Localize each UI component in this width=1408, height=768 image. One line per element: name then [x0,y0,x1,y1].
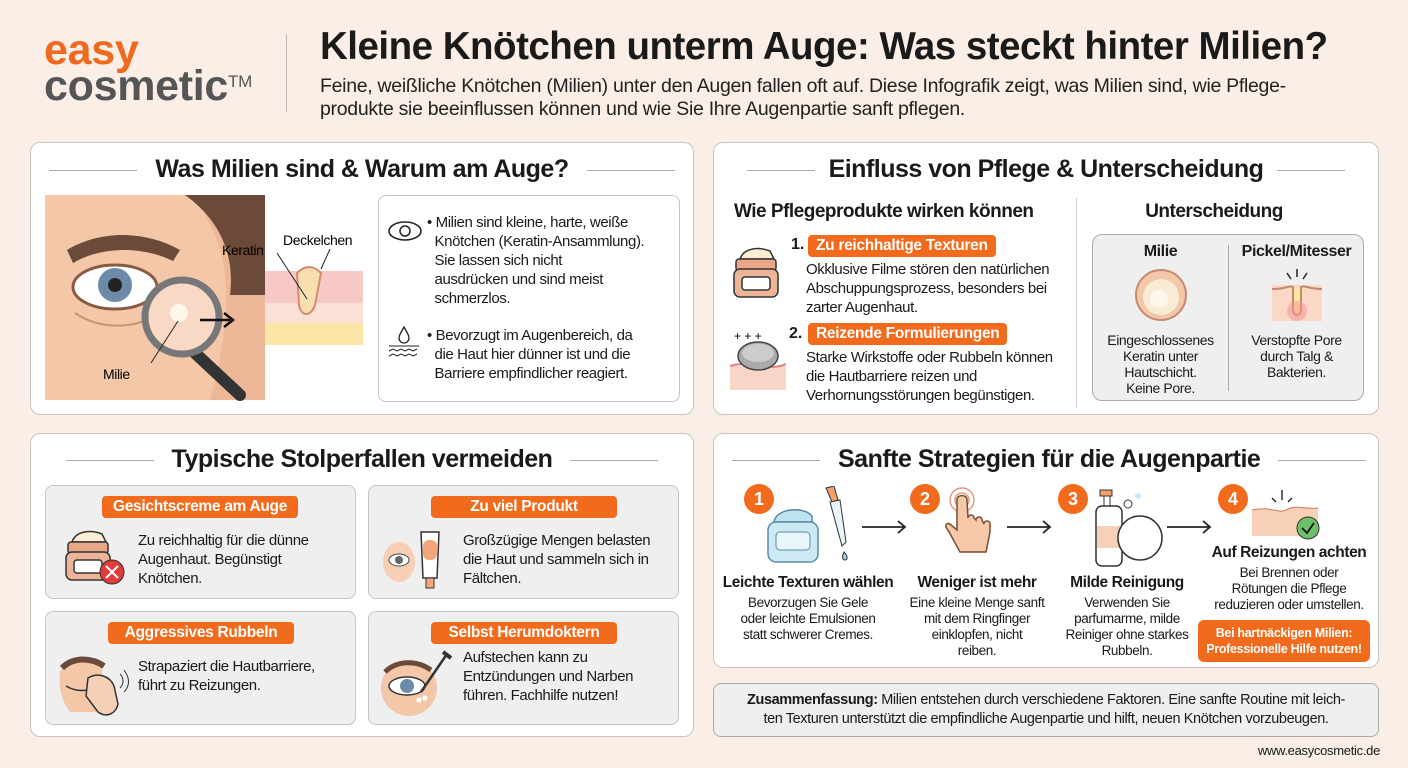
card 4: führen. Fachhilfe nutzen! [463,687,618,704]
step 3: Reiniger ohne starkes [1066,627,1188,642]
subtitle [320,75,1286,120]
heading: Was Milien sind & Warum am Auge? [155,155,569,183]
step 3: Rubbeln. [1102,643,1152,658]
step 2: mit dem Ringfinger [924,611,1030,626]
subtitle: Feine, weißliche Knötchen (Milien) unter den Augen fallen oft auf. Diese Infografik zeigt, was Milien sind, wie Pflege- [320,75,1286,97]
icon: scrub brush: + + + [734,329,762,343]
step 4: Bei Brennen oder [1240,565,1338,580]
summary: Zusammenfassung: Milien entstehen durch verschiedene Faktoren. Eine sanfte Routine mit leich- [747,692,1345,708]
step 1: 1 [754,489,764,509]
card 2 [368,485,679,599]
arrow [1007,520,1052,534]
column: Milie: Eingeschlossenes [1107,332,1214,348]
panel: Was Milien sind [30,142,694,415]
step 4: Auf Reizungen achten [1212,544,1366,561]
card 4: Aufstechen kann zu [463,649,588,666]
panel: Einfluss von Pflege: Reizende Formulierungen [816,325,999,342]
card 3: Aggressives Rubbeln [125,624,277,641]
bullet 2: Barriere empfindlicher reagiert. [435,365,628,382]
panel: Sanfte Strategien [713,433,1379,668]
panel: Einfluss von Pflege: die Hautbarriere reizen und [806,368,977,385]
summary: ten Texturen unterstützt die empfindliche Augenpartie und hilft, neuen Knötchen vorzubeugen. [763,711,1329,727]
icon: scrub brush [730,329,786,390]
column: Milie: Hautschicht. [1124,364,1197,380]
bullet 2: • Bevorzugt im Augenbereich, da [427,327,632,344]
column: Pickel: durch Talg & [1260,348,1333,364]
heading: Sanfte Strategien für die Augenpartie [838,445,1260,473]
arrow [862,520,906,534]
callout: Professionelle Hilfe nutzen! [1206,642,1362,656]
illustration: face, magnifier & skin section: Keratin [222,242,264,258]
bullet 1: Knötchen (Keratin-Ansammlung). [435,233,644,250]
step 1: statt schwerer Cremes. [743,627,873,642]
panel: Einfluss von Pflege [713,142,1379,415]
step 4 [1198,484,1370,662]
panel: Einfluss von Pflege: Starke Wirkstoffe oder Rubbeln können [806,349,1053,366]
step 2 [910,484,1045,658]
card 4 [368,611,679,725]
bullet 1: • Milien sind kleine, harte, weiße [427,214,628,231]
step 1: oder leichte Emulsionen [741,611,875,626]
card 2: Großzügige Mengen belasten [463,532,650,549]
card 1: Gesichtscreme am Auge [113,498,287,515]
bullet 1: ausdrücken und sind meist [435,271,603,288]
card 2: Zu viel Produkt [470,498,578,515]
summary [713,683,1379,737]
card 1 [45,485,356,599]
card 1: Knötchen. [138,570,202,587]
step 3: 3 [1068,489,1078,509]
panel: Einfluss von Pflege: Zu reichhaltige Texturen [816,237,988,254]
item 2: 2. [789,325,802,342]
logo: easy [44,26,138,74]
bullet 2 [427,327,633,382]
panel: Einfluss von Pflege: zarter Augenhaut. [806,299,918,316]
text box [378,195,680,402]
step 3: parfumarme, milde [1074,611,1180,626]
card 3: Strapaziert die Hautbarriere, [138,658,315,675]
step 3: Milde Reinigung [1070,574,1184,591]
panel: Einfluss von Pflege: Verhornungsstörungen begünstigen. [806,387,1035,404]
panel: Einfluss von Pflege: Okklusive Filme stören den natürlichen [806,261,1049,278]
column: Milie: Keine Pore. [1126,380,1195,396]
subtitle: produkte sie beeinflussen können und wie Sie Ihre Augenpartie sanft pflegen. [320,98,965,120]
step 1: Bevorzugen Sie Gele [748,595,868,610]
bullet 1: schmerzlos. [435,290,510,307]
column: Pickel: Bakterien. [1267,364,1326,380]
column: Pickel: Pickel/Mitesser [1242,243,1351,260]
card 1: Augenhaut. Begünstigt [138,551,281,568]
icon: eye [388,221,422,241]
column: Milie: Milie [1144,243,1177,260]
step 1 [723,484,893,642]
card 2: die Haut und sammeln sich in [463,551,649,568]
step 2: einklopfen, nicht [932,627,1022,642]
card 2: Fältchen. [463,570,521,587]
step 2: Eine kleine Menge sanft [910,595,1044,610]
item 1: 1. [791,236,804,253]
card 4: Entzündungen und Narben [463,668,633,685]
bullet 1 [427,214,644,307]
step 2: reiben. [958,643,996,658]
step 2: Weniger ist mehr [917,574,1037,591]
step 2: 2 [920,489,930,509]
column: Pickel [1242,243,1352,380]
heading: Typische Stolperfallen vermeiden [172,445,552,473]
callout [1198,620,1370,662]
icon: drop skin [388,326,419,356]
heading: Einfluss von Pflege & Unterscheidung [829,155,1263,183]
logo: cosmeticTM [44,62,252,110]
footer url: www.easycosmetic.de [1258,743,1380,758]
step 4: 4 [1228,489,1238,509]
icon: jar [733,248,779,298]
illustration: face, magnifier & skin section: Milie [103,366,130,382]
illustration: face, magnifier & skin section [45,195,363,401]
card 3 [45,611,356,725]
bullet 2: die Haut hier dünner ist und die [435,346,630,363]
card 1: Zu reichhaltig für die dünne [138,532,309,549]
step 4: Rötungen die Pflege [1232,581,1346,596]
arrow [1167,520,1212,534]
illustration: face, magnifier & skin section: Deckelchen [283,232,352,248]
logo [44,26,252,110]
step 3 [1058,484,1188,658]
title: Kleine Knötchen unterm Auge: Was steckt hinter Milien? [320,25,1328,68]
subheading left: Wie Pflegeprodukte wirken können [734,201,1034,222]
step 4: reduzieren oder umstellen. [1214,597,1364,612]
subheading right: Unterscheidung [1145,201,1283,222]
card 4: Selbst Herumdoktern [448,624,600,641]
column: Pickel: Verstopfte Pore [1251,332,1342,348]
column: Milie [1107,243,1214,396]
panel: Stolperfallen [30,433,694,737]
step 3: Verwenden Sie [1084,595,1170,610]
panel: Einfluss von Pflege: Abschuppungsprozess, besonders bei [806,280,1047,297]
callout: Bei hartnäckigen Milien: [1216,626,1352,640]
bullet 1: Sie lassen sich nicht [435,252,562,269]
step 1: Leichte Texturen wählen [723,574,893,591]
card 3: führt zu Reizungen. [138,677,260,694]
comparison box [1092,234,1364,401]
column: Milie: Keratin unter [1123,348,1198,364]
